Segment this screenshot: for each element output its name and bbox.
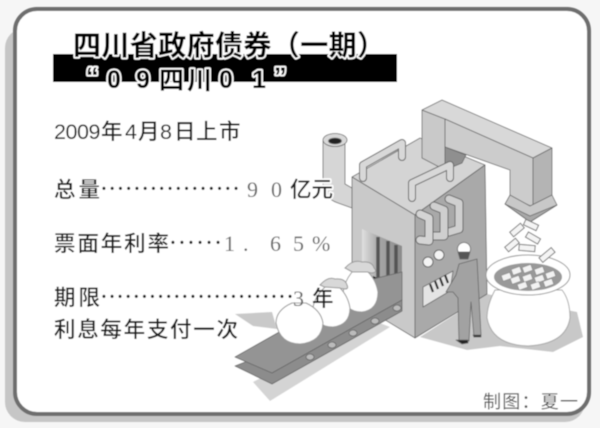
subtitle: 四 <box>159 67 184 95</box>
icon: big money bag <box>486 255 570 346</box>
text: term: 3 <box>293 286 304 311</box>
text: total amount: ••••••••••••••••• <box>102 183 238 195</box>
machine shadow <box>420 294 583 352</box>
text: total amount: 总量 <box>54 178 100 202</box>
subtitle: 0 <box>219 66 233 94</box>
title block <box>53 30 397 95</box>
text: total amount: 0 <box>271 177 282 202</box>
text: total amount: 9 <box>247 177 258 202</box>
icon: conveyor belt <box>235 272 402 384</box>
text: total amount <box>54 177 333 202</box>
credit: 制图：夏一 <box>483 392 578 412</box>
text: coupon rate: . <box>243 231 248 256</box>
text: term: 年 <box>312 287 334 311</box>
subtitle: 1 <box>252 66 266 94</box>
conveyor shadow <box>253 320 390 401</box>
subtitle: “ <box>86 63 98 91</box>
text: annual interest: 利息每年支付一次 <box>54 318 238 342</box>
left bag shadow <box>235 312 277 329</box>
icon: chimney pipe <box>323 134 352 208</box>
text: coupon rate: % <box>312 231 330 256</box>
icon: machine door <box>362 229 402 296</box>
icon: top handles <box>363 143 450 198</box>
text: coupon rate: 5 <box>293 231 304 256</box>
subtitle: ” <box>274 63 286 91</box>
machine body <box>352 138 487 338</box>
title band <box>53 54 397 82</box>
text: listing date: 2009年4月8日上市 <box>54 120 241 144</box>
text: term: •••••••••••••••••••••••• <box>102 291 292 303</box>
text: total amount: 亿元 <box>290 178 333 202</box>
subtitle: 川 <box>187 67 212 95</box>
subtitle: 0 <box>107 66 121 94</box>
subtitle: 9 <box>136 66 150 94</box>
icon: control knobs <box>423 250 444 267</box>
subtitle <box>86 63 286 95</box>
text: coupon rate: 票面年利率 <box>54 232 169 256</box>
text: coupon rate: 1 <box>224 231 235 256</box>
icon: arch pipe <box>422 100 557 222</box>
illustration: factory machine <box>235 100 583 401</box>
text: term <box>54 286 334 311</box>
icon: front pipes <box>420 199 459 241</box>
text: coupon rate: 6 <box>270 231 281 256</box>
icon: money bags on belt <box>276 261 378 344</box>
text: term: 期限 <box>54 286 100 310</box>
text: coupon rate: •••••• <box>171 237 220 249</box>
icon: worker <box>446 242 481 344</box>
icon: falling banknotes <box>505 219 555 262</box>
text: coupon rate <box>54 231 330 256</box>
title: 四川省政府债券（一期） <box>73 30 385 61</box>
icon: control panel <box>423 271 453 307</box>
